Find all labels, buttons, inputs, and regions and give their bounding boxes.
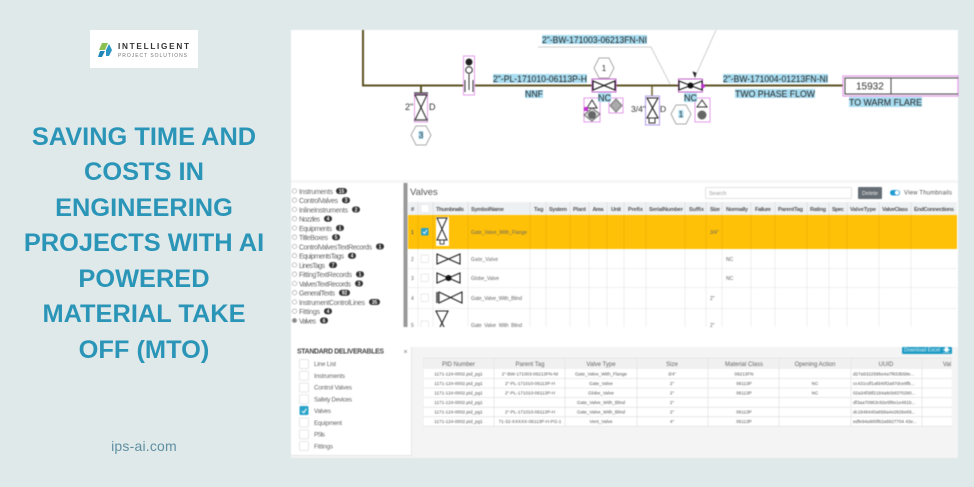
table rows: 06113P — [736, 419, 752, 424]
category rows: ControlValves — [299, 198, 338, 205]
table header: Val — [943, 362, 951, 368]
valve size label — [631, 104, 666, 114]
panel: category list — [292, 183, 408, 327]
category rows: ValvesTextRecords — [299, 282, 352, 288]
deliverable labels: PSIs — [314, 432, 325, 438]
title: POWERED — [78, 264, 210, 292]
icon: logo mark — [98, 43, 112, 57]
line labels: 2"-PL-171010-06113P-H — [493, 74, 587, 85]
table rows: 4" — [670, 419, 674, 424]
row numbers and checkboxes: 5 — [411, 323, 414, 329]
line labels: TO WARM FLARE — [849, 98, 922, 108]
row numbers and checkboxes: 3 — [411, 276, 414, 282]
hexagon tag 3: 3 — [419, 131, 424, 140]
title — [24, 122, 264, 364]
table header: Size — [666, 362, 678, 368]
table rows: NC — [812, 390, 819, 396]
icon: globe valve NC — [678, 79, 705, 92]
title: PROJECTS WITH AI — [24, 229, 264, 257]
logo — [90, 30, 198, 68]
table rows: Vent_Valve — [590, 419, 613, 424]
line labels: 2"-BW-171003-06213FN-NI — [542, 35, 647, 46]
table header — [411, 204, 954, 213]
hexagon tag 1: 1 — [679, 110, 684, 119]
table cells: 2" — [710, 323, 715, 329]
count badges: 1 — [359, 272, 362, 278]
deliverable labels: Fittings — [314, 443, 333, 450]
count badges: 3 — [345, 198, 348, 204]
website url: ips-ai.com — [111, 438, 177, 454]
category rows: FittingTextRecords — [299, 272, 352, 279]
table rows: 2"-PL-171010-06113P-H — [505, 390, 555, 396]
count badges: 6 — [323, 318, 326, 324]
table header: PID Number — [442, 362, 475, 368]
table cells: NC — [726, 257, 734, 263]
count badges: 4 — [327, 216, 330, 222]
icon: actuator left — [584, 98, 600, 122]
table header: UUID — [879, 362, 894, 368]
logo wordmark — [118, 42, 189, 59]
download excel button: Download Excel — [904, 348, 940, 354]
title: MATERIAL TAKE — [42, 300, 246, 328]
icon: gate valve NC — [592, 79, 616, 92]
screenshot panel — [290, 29, 960, 458]
title: COSTS IN — [84, 158, 204, 186]
line labels: NNF — [525, 89, 543, 100]
count badges: 15 — [339, 189, 344, 195]
table rows: 1171-124-0002.pid_pg1 — [434, 400, 483, 405]
category rows: Instruments — [299, 189, 334, 196]
count badges: 4 — [327, 309, 330, 315]
row numbers and checkboxes — [411, 228, 428, 329]
off-page connector 15932 — [843, 76, 958, 96]
valve size label: 3/4" — [631, 104, 646, 114]
panel: valves table — [408, 187, 957, 335]
count badges: 5 — [335, 235, 338, 241]
category rows: TitleBoxes — [299, 235, 328, 242]
count badges: 1 — [339, 226, 342, 232]
category rows: Equipments — [299, 226, 332, 233]
table header: Parent Tag — [516, 362, 544, 368]
table cells: Gate_Valve_With_Blind — [471, 323, 522, 329]
process line — [363, 30, 843, 94]
table header: Tag — [534, 207, 544, 213]
count badges: 92 — [342, 290, 347, 296]
table rows: 1171-124-0002.pid_pg1 — [434, 419, 483, 424]
table rows: 1171-124-0002.pid_pg1 — [434, 390, 483, 396]
table rows: Gate_Valve — [589, 381, 613, 386]
view thumbnails toggle: View Thumbnails — [904, 190, 952, 196]
table header: ParentTag — [778, 207, 804, 213]
table rows: 06113P — [736, 410, 752, 415]
category rows: InlineInstruments — [299, 208, 348, 214]
table rows: 06213FN — [735, 372, 753, 376]
row numbers and checkboxes: 1 — [411, 230, 414, 236]
category rows: EquipmentsTags — [299, 254, 344, 261]
leader arrows — [538, 30, 716, 84]
category rows: GeneralTexts — [299, 291, 336, 298]
table rows: 2" — [670, 400, 674, 405]
table cells: 2" — [710, 296, 715, 302]
deliverable labels: Instruments — [314, 373, 345, 380]
table header: Prefix — [628, 207, 644, 213]
category rows: LinesTags — [299, 263, 326, 270]
table rows: df3aa70963c82e5f8e1e481b... — [853, 400, 915, 405]
table cells: Globe_Valve — [471, 276, 499, 282]
panel: standard deliverables — [291, 347, 412, 456]
icon: hatched fitting — [609, 98, 623, 113]
checkboxes — [300, 360, 308, 450]
off-page connector 15932: 15932 — [856, 82, 884, 92]
hexagon tag 1 — [594, 58, 614, 78]
table rows: Gate_Valve_With_Blind — [577, 400, 626, 405]
table rows: 1171-124-0002.pid_pg1 — [434, 381, 483, 386]
table cells: 3/4" — [710, 230, 719, 236]
table rows: 2" — [670, 410, 674, 415]
table cells: Gate_Valve — [471, 257, 498, 263]
count badges — [320, 188, 384, 324]
logo wordmark: PROJECT SOLUTIONS — [118, 53, 188, 59]
table rows: dc1848440a658a4e2826e69... — [853, 410, 915, 415]
valve size label: 2" — [405, 102, 413, 112]
title: OFF (MTO) — [79, 336, 209, 364]
table rows: 71-32-XXXXX-06113P-H-PG-1 — [499, 419, 562, 424]
icon: gate valve 2 inch — [414, 93, 428, 122]
table body — [408, 202, 957, 335]
delete button: Delete — [862, 191, 878, 197]
valve thumbnails — [436, 217, 462, 335]
table rows: 2"-PL-171010-06113P-H — [505, 410, 555, 415]
table rows: cc431cdf1afd40f2a87dce8fb... — [853, 381, 915, 386]
hexagon tag 1 — [671, 105, 691, 124]
category rows — [292, 189, 372, 326]
table header: Area — [592, 207, 604, 213]
valve size label: D — [660, 104, 666, 114]
close icon: × — [404, 349, 408, 356]
count badges: 3 — [358, 281, 361, 287]
category rows: Nozzles — [299, 217, 320, 224]
deliverable labels: Control Valves — [314, 384, 352, 392]
valve size label: D — [429, 102, 436, 112]
table rows: 3/4" — [668, 372, 676, 376]
category rows: Fittings — [299, 309, 320, 316]
table header: Opening Action — [795, 362, 835, 368]
valve size label — [405, 102, 436, 112]
deliverable labels — [314, 361, 352, 450]
count badges: 7 — [332, 263, 335, 269]
table cells: Gate_Valve_With_Flange — [471, 230, 527, 236]
table header: SymbolName — [471, 207, 504, 213]
panel: P&ID drawing — [291, 30, 958, 183]
table rows: edfe94a900f62a6927704 43e... — [853, 419, 917, 424]
download excel button — [902, 347, 952, 354]
count badges: 1 — [379, 244, 382, 250]
table header: System — [549, 207, 567, 213]
table header: Normally — [726, 207, 749, 213]
table rows: 2" — [670, 381, 674, 386]
icon: gate valve 3/4 inch — [646, 86, 660, 125]
table header: Unit — [611, 207, 621, 213]
table rows: 1171-124-0002.pid_pg1 — [434, 410, 483, 415]
table header: Material Class — [725, 362, 763, 368]
icon: actuator right — [695, 98, 710, 122]
count badges: 35 — [372, 300, 377, 306]
table header: Spec — [832, 207, 844, 213]
deliverable labels: Line List — [314, 361, 336, 368]
table rows: NC — [812, 381, 819, 386]
table rows: 2"-BW-171003-06213FN-NI — [502, 372, 558, 376]
table rows: d27a5322595e4a7f833b58e... — [853, 372, 914, 376]
table header: Plant — [573, 207, 586, 213]
deliverables heading: STANDARD DELIVERABLES — [297, 348, 384, 356]
table cells: NC — [726, 276, 734, 282]
table header: Size — [710, 207, 720, 213]
table rows: 06113P — [736, 381, 752, 386]
search box — [706, 188, 852, 198]
count badges: 2 — [355, 207, 358, 213]
line labels — [493, 35, 922, 108]
deliverable labels: Safety Devices — [314, 396, 352, 403]
table rows: 2" — [670, 390, 674, 396]
hexagon tag 3 — [411, 126, 431, 145]
table header: ValveClass — [882, 207, 908, 213]
table header: SerialNumber — [649, 207, 684, 213]
table rows: Gate_Valve_With_Flange — [575, 372, 627, 376]
table cells: Gate_Valve_With_Blind — [471, 296, 522, 302]
line labels: NC — [598, 93, 611, 104]
category rows: InstrumentControlLines — [299, 300, 366, 307]
scrollbar — [404, 183, 408, 327]
title: ENGINEERING — [55, 194, 233, 222]
table rows: 1171-124-0002.pid_pg1 — [434, 372, 483, 376]
search box: Search — [709, 191, 726, 197]
hexagon tag 1: 1 — [602, 64, 607, 73]
table header: Valve Type — [586, 362, 616, 368]
deliverable labels: Equipment — [314, 420, 342, 427]
count badges: 4 — [351, 254, 354, 260]
deliverable labels: Valves — [314, 408, 331, 415]
row numbers and checkboxes: 4 — [411, 296, 414, 302]
category rows: ControlValvesTextRecords — [299, 244, 372, 252]
icon: instrument — [464, 56, 474, 95]
table header: Failure — [755, 207, 771, 213]
table cells — [471, 230, 734, 329]
table header: ValveType — [850, 207, 876, 213]
valves heading: Valves — [410, 187, 438, 198]
table rows: 2"-PL-171010-06113P-H — [505, 381, 555, 386]
line labels: 2"-BW-171004-01213FN-NI — [723, 74, 828, 85]
table header: Suffix — [689, 207, 705, 213]
table rows: 02a34f38f2184a8cb8370290... — [853, 390, 915, 396]
table rows: Gate_Valve_With_Blind — [577, 410, 626, 415]
table header: Rating — [810, 207, 827, 213]
table header: # — [411, 207, 415, 213]
row numbers and checkboxes: 2 — [411, 257, 414, 263]
title: SAVING TIME AND — [32, 122, 256, 150]
table header: Thumbnails — [436, 207, 464, 213]
table rows — [434, 372, 917, 424]
logo wordmark: INTELLIGENT — [118, 42, 189, 51]
category rows: Valves — [299, 318, 316, 326]
deliverables table — [423, 358, 952, 426]
table header: EndConnections — [914, 207, 954, 213]
table rows: 06113P — [736, 390, 752, 396]
table rows: Globe_Valve — [588, 390, 614, 396]
line labels: TWO PHASE FLOW — [735, 89, 815, 100]
line labels: NC — [684, 93, 697, 104]
table header — [442, 362, 951, 368]
delete button — [858, 187, 882, 199]
